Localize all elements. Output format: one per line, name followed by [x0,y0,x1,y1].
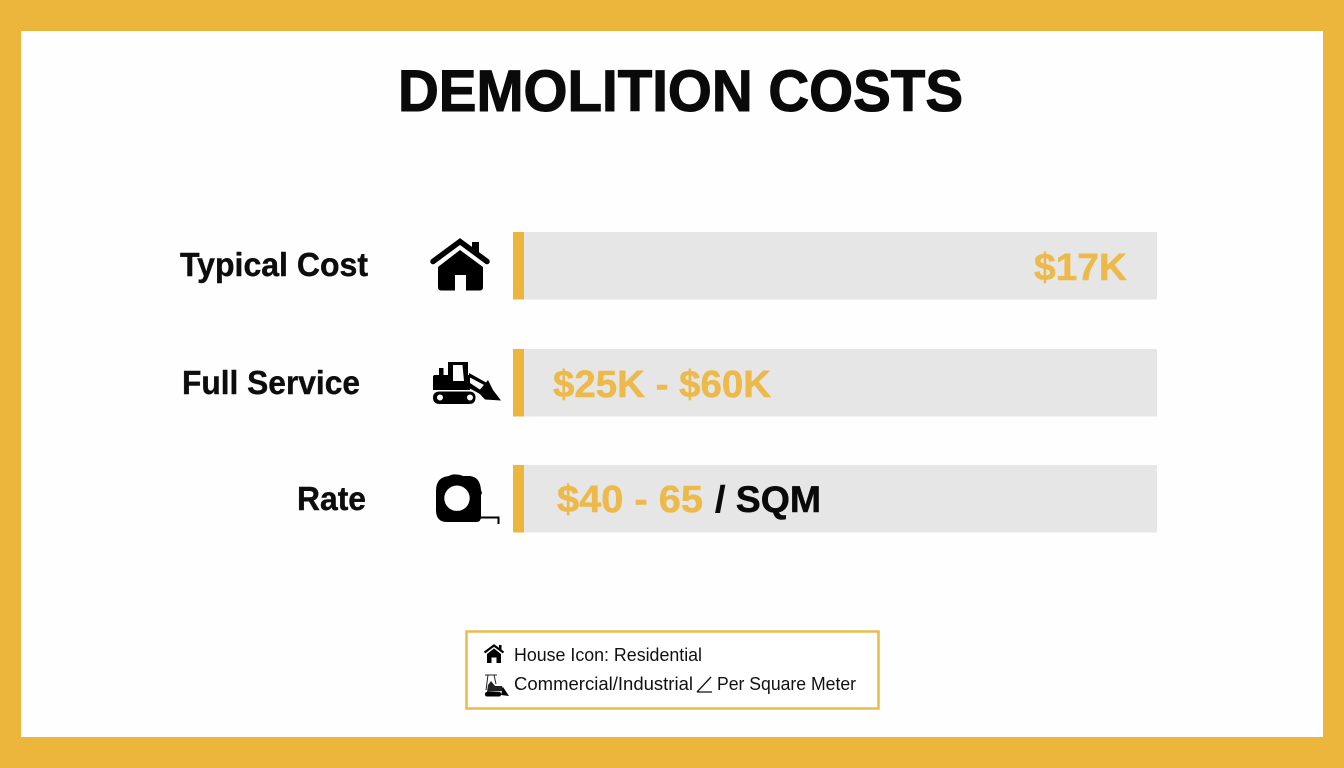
bar: full service [513,349,1157,416]
value: $40 - 65 / SQM: / SQM [715,479,821,520]
value: $40 - 65 / SQM [557,479,821,521]
icon: bulldozer [433,362,501,404]
legend text: residential: House Icon: Residential [514,645,702,665]
label: rate: Rate [297,480,366,517]
icon: tape measure [436,474,498,524]
legend text: per square meter: Per Square Meter [717,674,856,694]
label: typical cost: Typical Cost [180,246,368,283]
row: full service [182,349,1157,416]
legend icon: angle [697,677,712,692]
bar: rate [513,465,1157,532]
row: rate [297,465,1157,532]
value: $25K - $60K: $25K - $60K [553,364,772,406]
legend [466,632,878,708]
legend box [466,632,878,708]
bar: typical cost [513,232,1157,300]
value: $17K: $17K [1034,247,1128,289]
title: DEMOLITION COSTS [398,59,963,124]
row: typical cost [180,232,1157,300]
label: full service: Full Service [182,364,360,401]
legend icon: bulldozer [485,675,509,696]
legend icon: house [484,645,504,663]
legend text: commercial: Commercial/Industrial [514,674,693,694]
icon: house [433,242,487,290]
value: $40 - 65 / SQM: $40 - 65 [557,479,703,521]
